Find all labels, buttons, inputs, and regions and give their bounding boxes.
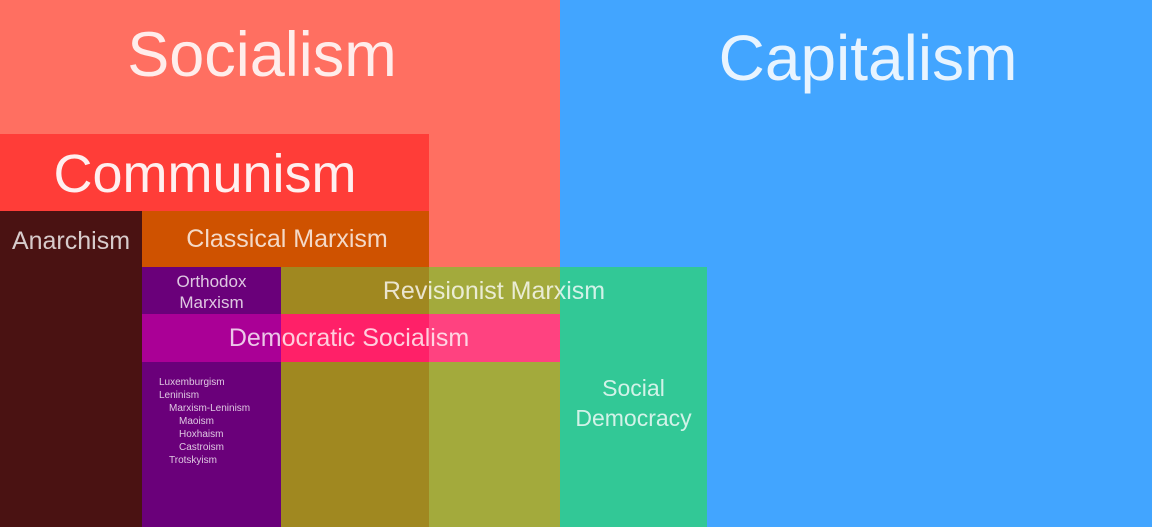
- panel: revisionist marxism (socialism part): [429, 267, 560, 527]
- panel: communism: [0, 134, 429, 211]
- heading: communism: Communism: [53, 144, 357, 204]
- panel: revisionist marxism (communism part): [281, 267, 429, 527]
- text block: marxist tendencies list: Maoism: [179, 416, 214, 427]
- panel: social democracy: [560, 267, 707, 527]
- text block: marxist tendencies list: Leninism: [159, 390, 199, 401]
- label: classical marxism: Classical Marxism: [186, 225, 388, 253]
- panel: capitalism: [560, 0, 1152, 527]
- text block: marxist tendencies list: Castroism: [179, 442, 224, 453]
- label: social democracy: Democracy: [575, 405, 692, 431]
- label: orthodox marxism: [177, 272, 246, 312]
- panel: democratic socialism (revisionist overlap): [281, 314, 429, 362]
- label: democratic socialism: Democratic Socialism: [229, 324, 469, 352]
- panel: anarchism: [0, 211, 142, 527]
- label: social democracy: [575, 375, 692, 431]
- text block: marxist tendencies list: Hoxhaism: [179, 429, 223, 440]
- text block: marxist tendencies list: Luxemburgism: [159, 377, 225, 388]
- text block: marxist tendencies list: Marxism-Leninism: [169, 403, 250, 414]
- label: anarchism: Anarchism: [12, 227, 130, 255]
- label: social democracy: Social: [602, 375, 665, 401]
- heading: socialism: Socialism: [127, 20, 397, 90]
- label: orthodox marxism: Orthodox: [177, 272, 246, 291]
- panel: socialism: [0, 0, 560, 527]
- panel: classical marxism: [142, 211, 429, 267]
- panel: democratic socialism (socialism overlap): [429, 314, 560, 362]
- label: revisionist marxism: Revisionist Marxism: [383, 277, 605, 305]
- text block: marxist tendencies list: [159, 377, 250, 466]
- text block: marxist tendencies list: Trotskyism: [169, 455, 217, 466]
- heading: capitalism: Capitalism: [719, 22, 1017, 94]
- label: orthodox marxism: Marxism: [179, 293, 244, 312]
- panel: orthodox marxism: [142, 267, 281, 527]
- panel: democratic socialism (orthodox overlap): [142, 314, 281, 362]
